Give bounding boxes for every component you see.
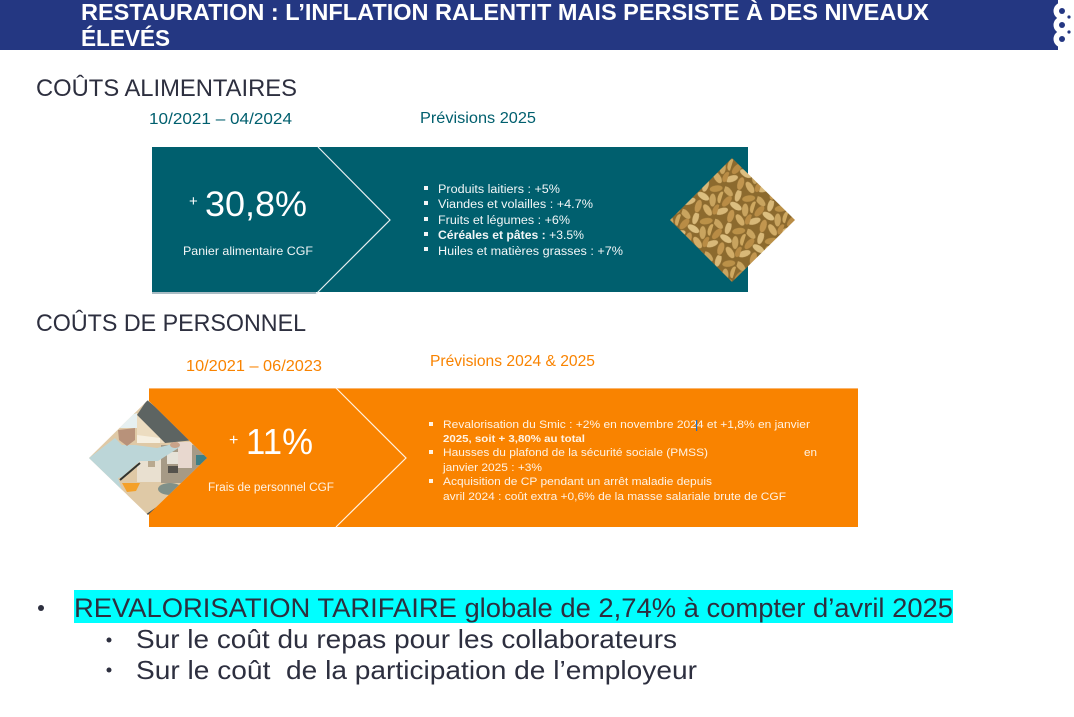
title <box>81 0 930 51</box>
stat: +11%: + <box>229 432 238 449</box>
staff forecast list: 2025, soit + 3,80% au total <box>443 433 585 445</box>
food forecast list: Céréales et pâtes : +3.5% <box>438 230 584 242</box>
staff forecast list: Hausses du plafond de la sécurité sociale (PMSS) <box>443 447 708 459</box>
highlighted main bullet: REVALORISATION TARIFAIRE globale de 2,74% à compter d’avril 2025 <box>74 593 953 623</box>
panel: food costs <box>152 147 748 294</box>
header banner <box>0 0 1074 52</box>
staff forecast list: janvier 2025 : +3% <box>442 462 542 474</box>
staff forecast list: Acquisition de CP pendant un arrêt maladie depuis <box>443 476 713 488</box>
heading: coûts de personnel: COÛTS DE PERSONNEL <box>36 309 306 337</box>
price revaluation highlight and list <box>38 590 953 685</box>
image: chef in kitchen diamond <box>89 400 207 515</box>
sub bullet: repas: Sur le coût du repas pour les collaborateurs <box>136 624 677 654</box>
staff forecast list <box>429 419 817 503</box>
period label: 10/2021 – 06/2023: 10/2021 – 06/2023 <box>186 358 322 375</box>
image: wheat grains diamond <box>670 158 795 282</box>
period label: prévisions 2024 et 2025: Prévisions 2024 & 2025 <box>430 353 595 370</box>
stat caption: frais de personnel: Frais de personnel CGF <box>208 482 334 494</box>
period label: 10/2021 – 04/2024: 10/2021 – 04/2024 <box>149 111 292 128</box>
stat caption: panier alimentaire: Panier alimentaire CGF <box>183 244 313 258</box>
food forecast list: Viandes et volailles : +4.7% <box>438 199 593 211</box>
panel: staff costs <box>149 388 858 527</box>
staff forecast list: Revalorisation du Smic : +2% en novembre 2024 et +1,8% en janvier <box>443 419 810 431</box>
food forecast list: Produits laitiers : +5% <box>438 184 560 196</box>
stat: +30,8%: + <box>189 193 198 210</box>
title: ÉLEVÉS <box>81 24 170 51</box>
staff forecast list: en <box>804 447 817 459</box>
stat: +30,8%: 30,8% <box>205 185 307 224</box>
stat: +11%: 11% <box>246 421 313 462</box>
food forecast list: Fruits et légumes : +6% <box>438 215 570 227</box>
food forecast list: Huiles et matières grasses : +7% <box>438 246 623 258</box>
heading: coûts alimentaires: COÛTS ALIMENTAIRES <box>36 74 297 102</box>
period label: prévisions 2025: Prévisions 2025 <box>420 110 536 127</box>
food forecast list <box>424 184 623 258</box>
staff forecast list: avril 2024 : coût extra +0,6% de la masse salariale brute de CGF <box>443 491 786 503</box>
sub bullet: participation: Sur le coût de la participation de l’employeur <box>136 655 697 685</box>
